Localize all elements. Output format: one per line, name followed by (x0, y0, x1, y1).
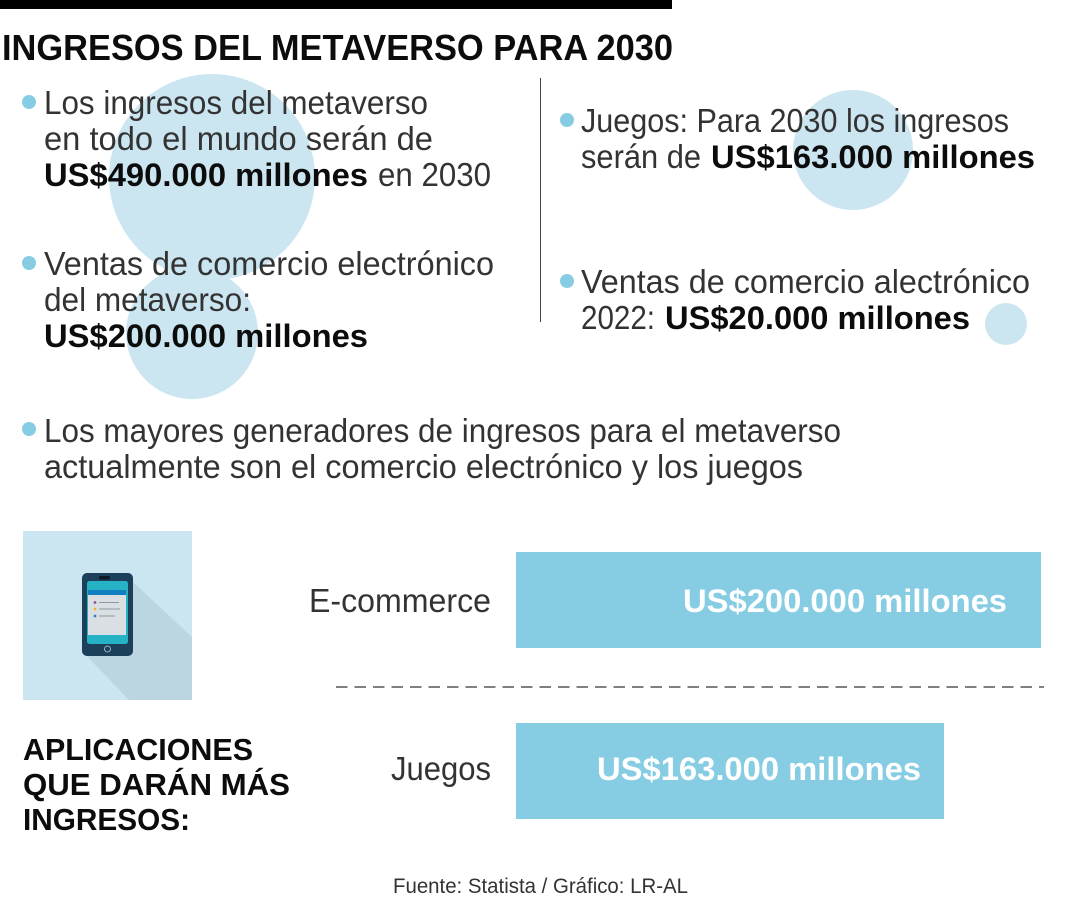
text block: ventas 2022 (560, 263, 1030, 336)
text block: ingresos totales: US$490.000 millones (44, 157, 368, 193)
top bar (0, 0, 672, 9)
title: INGRESOS DEL METAVERSO PARA 2030 (2, 27, 673, 68)
heading: aplicaciones: APLICACIONES (23, 732, 253, 767)
text block: mayores generadores: Los mayores generadores de ingresos para el metaverso (44, 412, 841, 449)
value: e-commerce: US$200.000 millones (683, 583, 1007, 619)
text block: ventas de comercio electronico (22, 245, 494, 354)
text block: juegos (560, 102, 1035, 175)
label: juegos: Juegos (391, 750, 491, 787)
value: juegos: US$163.000 millones (597, 751, 921, 787)
text block: juegos: US$163.000 millones (711, 139, 1035, 175)
text block: ingresos totales: en 2030 (378, 156, 491, 193)
text block: ventas 2022: 2022: (581, 299, 655, 336)
text block: juegos: serán de (581, 138, 701, 175)
text block: ingresos totales: en todo el mundo serán de (44, 120, 433, 157)
dashed separator (336, 686, 1044, 688)
circle: 200.000 millones (126, 267, 258, 399)
heading: aplicaciones: QUE DARÁN MÁS (23, 767, 290, 802)
text block: ventas de comercio electronico: del metaverso: (44, 281, 251, 318)
bar chart (309, 552, 1044, 819)
text block: ingresos totales: Los ingresos del metaverso (44, 84, 428, 121)
icon: smartphone (23, 531, 192, 700)
text block: ventas de comercio electronico: Ventas de comercio electrónico (44, 245, 494, 282)
label: e-commerce: E-commerce (309, 582, 491, 619)
text block: ingresos totales (22, 84, 491, 193)
circle: 490.000 millones (109, 74, 315, 280)
circle: 20.000 millones (985, 303, 1027, 345)
text block: ventas 2022: US$20.000 millones (665, 300, 970, 336)
heading: aplicaciones: INGRESOS: (23, 802, 190, 837)
vertical divider (540, 78, 541, 322)
source: Fuente: Statista / Gráfico: LR-AL (393, 875, 688, 898)
text block: ventas de comercio electronico: US$200.000 millones (44, 318, 368, 354)
text block: ventas 2022: Ventas de comercio alectrónico (581, 263, 1030, 300)
text block: mayores generadores: actualmente son el comercio electrónico y los juegos (44, 448, 803, 485)
heading: aplicaciones (23, 732, 290, 837)
text block: juegos: Juegos: Para 2030 los ingresos (581, 102, 1009, 139)
bar: juegos (516, 723, 944, 819)
circle: 163.000 millones (793, 90, 913, 210)
bar: e-commerce (516, 552, 1041, 648)
text block: mayores generadores (22, 412, 841, 485)
